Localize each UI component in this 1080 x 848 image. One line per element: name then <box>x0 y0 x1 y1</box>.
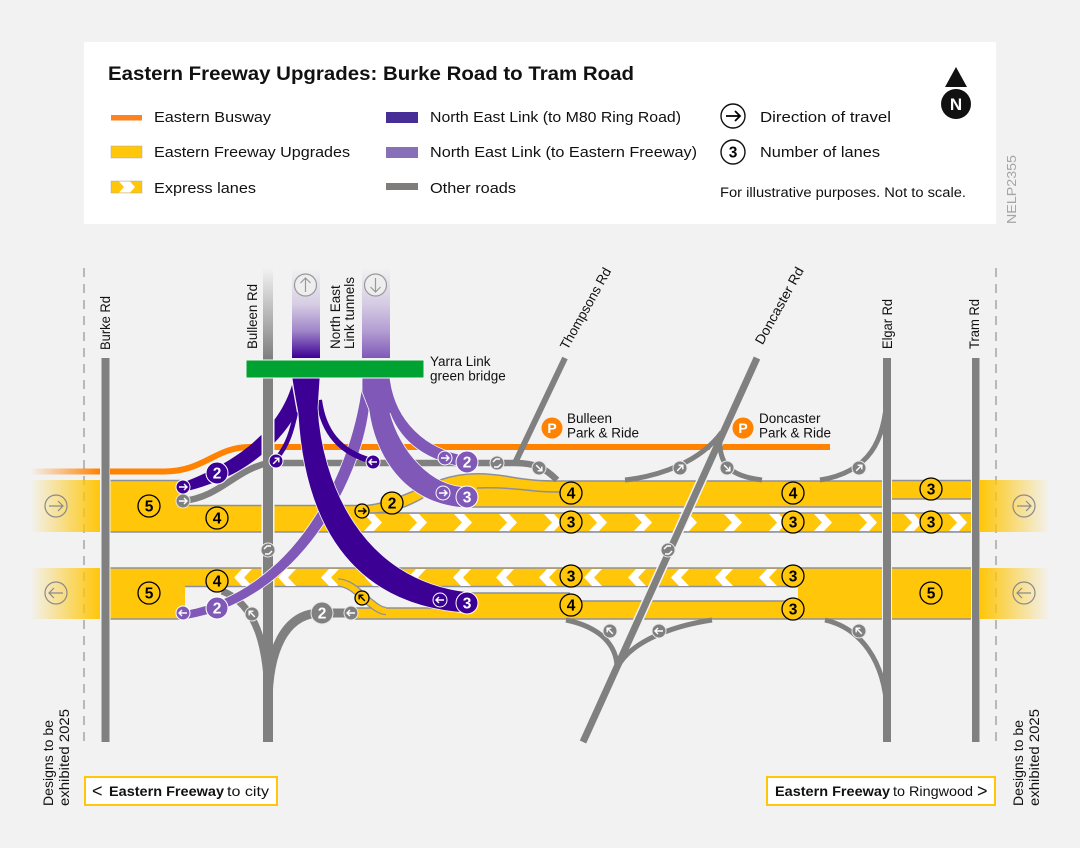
purple lane circles and arrows <box>176 451 478 620</box>
express lane chevrons eastbound <box>364 514 967 531</box>
callout: to Ringwood: to Ringwood <box>893 783 973 799</box>
North East Link branch passing under Bulleen Rd <box>187 385 297 491</box>
lane number circles yellow: 5 <box>145 498 154 516</box>
purple lane numbers: 2 <box>463 454 471 472</box>
legend item: Eastern Busway <box>111 109 272 126</box>
callout: to Ringwood <box>767 777 995 805</box>
purple lane numbers: 3 <box>463 490 472 506</box>
yellow direction arrows <box>352 504 372 608</box>
lane number circles yellow: 3 <box>927 514 936 532</box>
lane number circles yellow: 2 <box>388 496 396 512</box>
label: North East Link tunnels: North East <box>328 285 343 349</box>
icon: north arrow <box>941 67 971 119</box>
North East Link tunnels <box>292 268 390 358</box>
legend item: Eastern Freeway Upgrades: Eastern Freeway Upgrades <box>154 144 350 161</box>
legend item: Other roads <box>386 180 516 197</box>
legend item: Express lanes <box>111 180 256 197</box>
purple lane numbers <box>213 454 472 618</box>
legend item: Number of lanes <box>721 140 880 164</box>
other roads: ramps <box>183 358 887 712</box>
North East Link to M80 branches <box>277 378 468 613</box>
edge direction arrows <box>45 495 1035 604</box>
freeway eastbound strips <box>110 474 971 532</box>
icon: north arrow: N <box>950 95 962 114</box>
lane number circles yellow: 3 <box>567 514 576 532</box>
callout: to city: Eastern Freeway <box>109 783 224 799</box>
callout: to city: < <box>92 781 103 801</box>
Eastern Busway <box>30 447 830 474</box>
note: designs right: exhibited 2025 <box>1026 709 1042 806</box>
callout: to city <box>85 777 277 805</box>
North East Link to Eastern Freeway branches <box>188 378 468 619</box>
Bulleen Park and Ride: P <box>547 420 557 436</box>
lane number circles yellow: 3 <box>567 568 576 586</box>
disclaimer: For illustrative purposes. Not to scale. <box>720 185 966 200</box>
lane number circles yellow <box>138 478 942 620</box>
grey road circles and arrows <box>176 456 869 641</box>
road label: Thompsons Rd: Thompsons Rd <box>557 265 614 352</box>
legend item: Number of lanes: 3 <box>729 144 738 162</box>
legend item: Number of lanes: Number of lanes <box>760 144 880 161</box>
legend item: North East Link to Eastern Freeway: North East Link (to Eastern Freeway) <box>430 144 697 161</box>
panel: legend <box>84 42 996 224</box>
lane number circles yellow: 4 <box>213 510 222 528</box>
legend item: Express lanes: Express lanes <box>154 180 256 197</box>
label: Yarra Link green bridge: green bridge <box>430 368 506 384</box>
note: designs left: Designs to be <box>40 720 56 806</box>
freeway fade-outs left <box>30 480 100 619</box>
title: Eastern Freeway Upgrades: Burke Road to Tram Road <box>108 63 634 85</box>
express lane chevrons westbound <box>234 569 777 586</box>
Doncaster Park and Ride: Park & Ride <box>759 426 831 440</box>
road label: Tram Rd: Tram Rd <box>967 299 982 349</box>
reference code: NELP2355 <box>1004 155 1019 224</box>
Bulleen Park and Ride: Bulleen <box>567 411 612 426</box>
legend item: Other roads: Other roads <box>430 180 516 197</box>
freeway westbound strips <box>110 568 971 619</box>
callout: to Ringwood: > <box>977 781 988 801</box>
lane number circles yellow: 3 <box>789 568 798 586</box>
note: designs right <box>1010 709 1042 806</box>
note: designs right: Designs to be <box>1010 720 1026 806</box>
legend item: Eastern Busway: Eastern Busway <box>154 109 272 126</box>
road label: Burke Rd: Burke Rd <box>98 296 113 350</box>
label: North East Link tunnels: Link tunnels <box>342 277 357 349</box>
road label: Bulleen Rd: Bulleen Rd <box>245 284 260 349</box>
legend item: Direction of travel <box>721 104 891 128</box>
lane number circles yellow: 5 <box>927 586 936 602</box>
slip lane between westbound carriageways <box>338 582 386 611</box>
freeway fade-outs right <box>980 480 1050 619</box>
Doncaster Park and Ride: P <box>738 420 748 436</box>
purple lane numbers: 2 <box>213 466 221 482</box>
lane number circles yellow: 3 <box>927 482 936 498</box>
legend item: Direction of travel: Direction of travel <box>760 109 891 126</box>
lane number circles yellow: 4 <box>567 598 576 614</box>
lane number circles yellow: 3 <box>789 602 798 618</box>
legend item: North East Link to M80: North East Link (to M80 Ring Road) <box>430 109 681 126</box>
Doncaster Park and Ride <box>732 411 831 440</box>
label: Yarra Link green bridge: Yarra Link <box>430 354 491 369</box>
boundary dashed lines <box>84 268 996 742</box>
road label: Elgar Rd: Elgar Rd <box>880 299 895 349</box>
note: designs left: exhibited 2025 <box>56 709 72 806</box>
lane number circles yellow: 4 <box>789 486 798 502</box>
vertical roads <box>102 268 980 742</box>
callout: to city: to city <box>227 783 269 799</box>
Bulleen Park and Ride: Park & Ride <box>567 426 639 440</box>
lane number circles yellow: 5 <box>145 586 154 602</box>
lane number circles yellow: 4 <box>213 574 222 590</box>
purple lane numbers: 2 <box>213 600 221 618</box>
note: designs left <box>40 709 72 806</box>
purple lane numbers: 3 <box>463 596 472 612</box>
road label: Doncaster Rd: Doncaster Rd <box>752 264 807 347</box>
lane number circles yellow: 4 <box>567 486 576 502</box>
grey road circles and arrows: 2 <box>318 606 326 622</box>
Doncaster Park and Ride: Doncaster <box>759 411 821 426</box>
Bulleen Park and Ride <box>542 411 639 440</box>
lane number circles yellow: 3 <box>789 514 798 532</box>
callout: to Ringwood: Eastern Freeway <box>775 783 890 799</box>
Yarra Link green bridge <box>246 360 424 378</box>
